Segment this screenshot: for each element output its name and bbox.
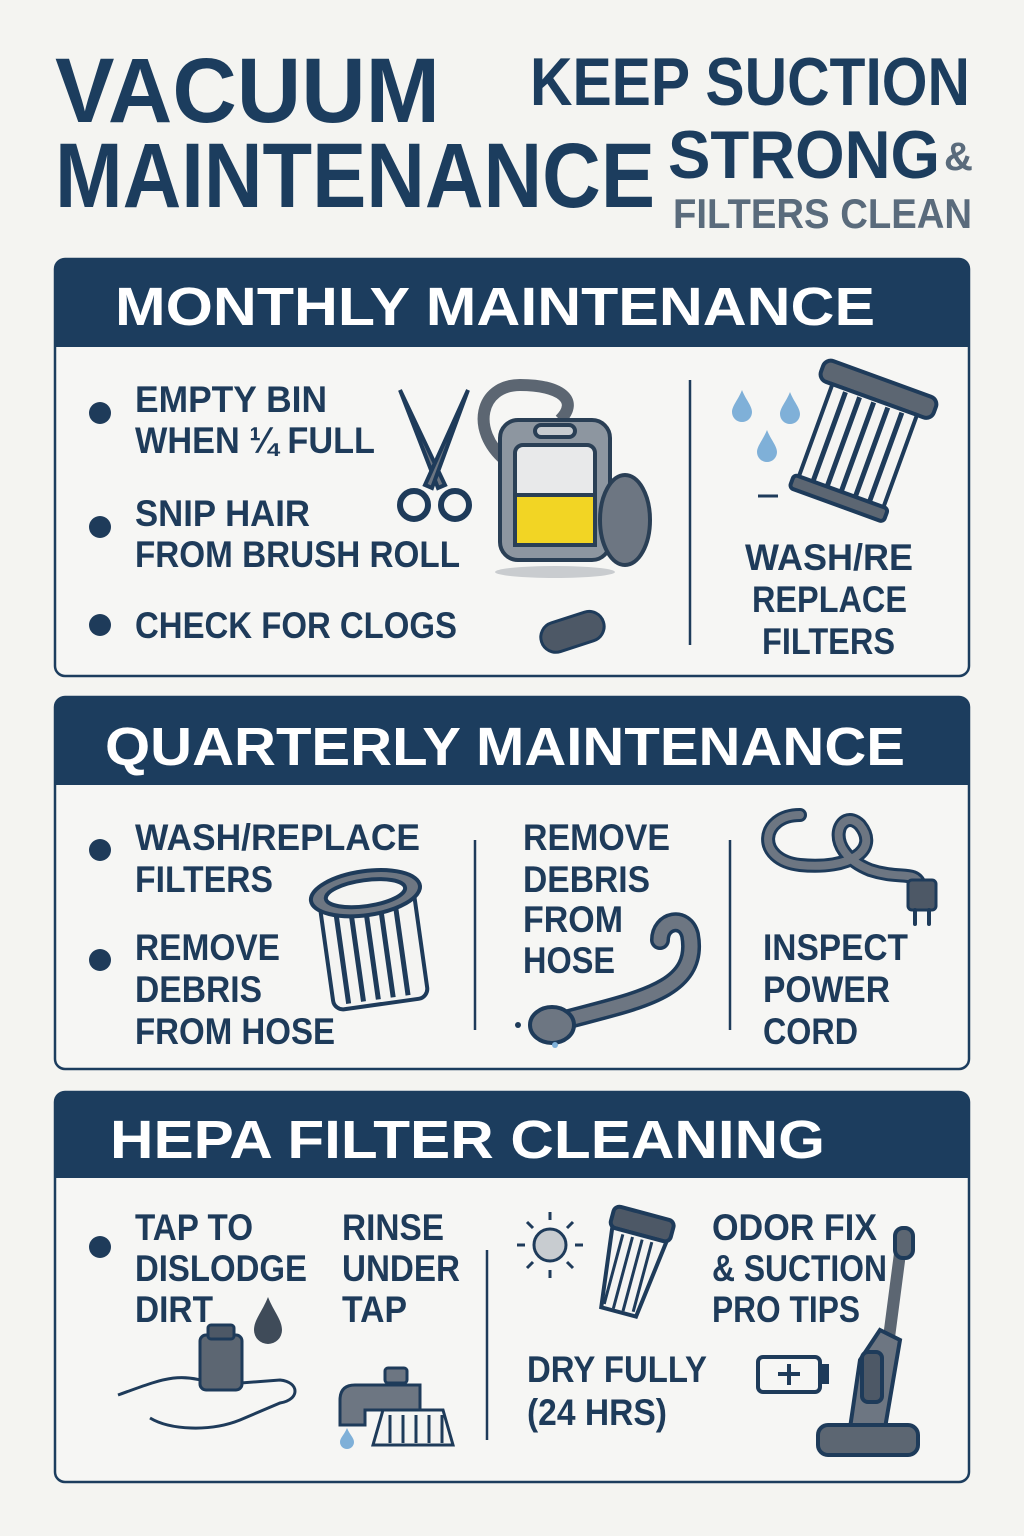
text: rinse under tap: RINSE (342, 1207, 444, 1248)
icon: canister vacuum (484, 385, 650, 578)
title: VACUUM (55, 40, 440, 142)
icon: faucet (340, 1368, 453, 1449)
quarterly tasks list: DEBRIS (135, 969, 262, 1010)
text: odor fix (712, 1207, 887, 1330)
text: wash/replace filters: WASH/RE (745, 537, 913, 578)
text: tap to dislodge dirt: TAP TO (135, 1207, 253, 1248)
text: tap to dislodge dirt (89, 1207, 307, 1330)
heading: hepa: HEPA FILTER CLEANING (110, 1110, 825, 1170)
text: tap to dislodge dirt: DISLODGE (135, 1248, 307, 1289)
text: remove debris from hose: HOSE (523, 940, 615, 981)
icon: battery (758, 1357, 827, 1392)
icon: clog piece (537, 608, 608, 656)
monthly tasks list: CHECK FOR CLOGS (135, 605, 457, 646)
panel: quarterly (55, 697, 969, 1069)
text: wash/replace filters: FILTERS (762, 621, 895, 662)
icon: hand with filter (118, 1297, 295, 1428)
icon: water drops (732, 390, 800, 462)
heading: monthly (55, 259, 969, 347)
text: remove debris from hose: REMOVE (523, 817, 670, 858)
text: inspect power cord: CORD (763, 1011, 858, 1052)
title (55, 40, 655, 227)
text: wash/replace filters (745, 537, 913, 662)
subtitle (530, 44, 973, 237)
title: MAINTENANCE (55, 125, 655, 227)
text: remove debris from hose: DEBRIS (523, 859, 650, 900)
text: inspect power cord: POWER (763, 969, 890, 1010)
text: dry fully: (24 HRS) (527, 1392, 667, 1433)
quarterly tasks list: FILTERS (135, 859, 273, 900)
panel: hepa filter cleaning (55, 1092, 969, 1482)
icon: scissors (400, 390, 469, 519)
text: wash/replace filters: REPLACE (752, 579, 907, 620)
icon: stick vacuum (818, 1228, 918, 1455)
text: odor fix: ODOR FIX (712, 1207, 877, 1248)
icon: sun (517, 1212, 583, 1278)
text: dry fully (527, 1349, 707, 1433)
quarterly tasks list: REMOVE (135, 927, 280, 968)
monthly tasks list: EMPTY BIN (135, 379, 327, 420)
heading: hepa (55, 1092, 969, 1178)
monthly tasks list: WHEN ¼ FULL (135, 420, 375, 461)
monthly tasks list (89, 379, 460, 646)
heading: monthly: MONTHLY MAINTENANCE (115, 277, 875, 337)
text: remove debris from hose: FROM (523, 899, 623, 940)
text: dry fully: DRY FULLY (527, 1349, 707, 1390)
monthly tasks list: SNIP HAIR (135, 493, 310, 534)
text: remove debris from hose (523, 817, 670, 981)
text: odor fix: PRO TIPS (712, 1289, 860, 1330)
icon: power cord (768, 815, 936, 924)
text: inspect power cord (763, 927, 908, 1052)
monthly tasks list: FROM BRUSH ROLL (135, 534, 460, 575)
subtitle: & (944, 135, 973, 179)
text: tap to dislodge dirt: DIRT (135, 1289, 213, 1330)
subtitle: FILTERS CLEAN (673, 190, 972, 237)
icon: drying filter (589, 1205, 675, 1320)
heading: quarterly (55, 697, 969, 785)
icon: filter cartridge (780, 358, 939, 525)
text: rinse under tap: TAP (342, 1289, 407, 1330)
text: inspect power cord: INSPECT (763, 927, 908, 968)
text: odor fix: & SUCTION (712, 1248, 887, 1289)
subtitle: STRONG (668, 117, 940, 193)
quarterly tasks list (89, 817, 420, 1052)
text: rinse under tap (342, 1207, 460, 1330)
text: rinse under tap: UNDER (342, 1248, 460, 1289)
icon: hose (515, 922, 691, 1048)
quarterly tasks list: WASH/REPLACE (135, 817, 420, 858)
quarterly tasks list: FROM HOSE (135, 1011, 335, 1052)
subtitle: KEEP SUCTION (530, 44, 970, 120)
panel: monthly (55, 259, 969, 676)
heading: quarterly: QUARTERLY MAINTENANCE (105, 717, 905, 777)
icon: cylindrical filter (308, 864, 435, 1012)
